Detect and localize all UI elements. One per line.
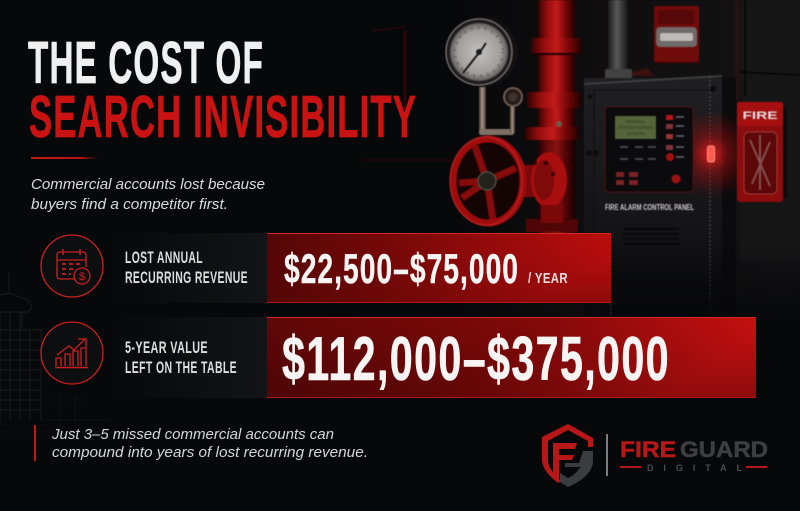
title line 1: THE COST OF: [28, 30, 264, 96]
icon: growth chart: [41, 322, 103, 384]
subtitle: [31, 176, 265, 213]
fire pull station: [737, 102, 787, 202]
wall: [440, 0, 800, 320]
label text: RECURRING REVENUE: [125, 268, 248, 287]
keypad: [620, 147, 656, 159]
panel bolts: [586, 86, 716, 156]
title rule: [31, 157, 98, 159]
icon: calendar with dollar: [41, 235, 103, 297]
wordmark FIRE: FIRE: [620, 437, 676, 462]
label text: LOST ANNUAL: [125, 248, 203, 267]
label text: [125, 338, 237, 377]
label text: 5-YEAR VALUE: [125, 338, 208, 357]
icon: shield monogram: [542, 424, 593, 487]
label text: [125, 248, 248, 287]
row 1: lost annual recurring revenue: [41, 233, 611, 303]
callout: [34, 425, 368, 461]
grey conduit: [605, 0, 655, 81]
callout bar: [34, 425, 36, 461]
red vertical pipe: [525, 0, 582, 233]
logo divider: [606, 434, 608, 476]
control face: [605, 107, 693, 192]
equipment photo illustration: [362, 0, 800, 322]
valve body: [515, 152, 567, 223]
darkening below the panel: [611, 240, 800, 322]
logo: FireGuard Digital: [542, 424, 768, 487]
lcd display: NORMAL: [626, 119, 646, 124]
valve handwheel: [450, 137, 523, 225]
label text: LEFT ON THE TABLE: [125, 358, 237, 377]
lcd display: SYSTEM NORMAL: [617, 125, 654, 130]
wordmark GUARD: GUARD: [680, 437, 768, 462]
callout text: [51, 426, 368, 461]
pressure gauge: [446, 17, 518, 87]
callout text: compound into years of lost recurring revenue.: [52, 444, 368, 461]
value box: [267, 317, 756, 398]
lcd display: [615, 116, 656, 139]
alarm strobe: [654, 6, 699, 64]
title line 2: SEARCH INVISIBILITY: [29, 84, 417, 150]
red glow: [667, 110, 755, 198]
title: [28, 30, 417, 150]
fire alarm control panel: [584, 76, 755, 318]
lcd display: 10:15 AM: [627, 131, 645, 136]
row 2: five-year value: [41, 317, 756, 398]
value box: [267, 233, 611, 303]
callout text: Just 3–5 missed commercial accounts can: [51, 426, 334, 443]
digital tagline: DIGITAL: [647, 463, 742, 473]
subtitle: buyers find a competitor first.: [31, 196, 228, 213]
led: [708, 146, 714, 162]
icon: calendar with dollar: $: [79, 271, 85, 283]
value: $22,500–$75,000: [284, 245, 519, 292]
faint building sketch: [0, 272, 120, 440]
label panel: [105, 233, 267, 303]
unit: / YEAR: [528, 270, 568, 287]
vent slots: [623, 229, 679, 244]
label panel: [105, 317, 267, 398]
fire pull station: FIRE: [742, 110, 778, 122]
panel label: FIRE ALARM CONTROL PANEL: [605, 203, 694, 212]
subtitle: Commercial accounts lost because: [31, 176, 265, 193]
brass pipework: [479, 87, 522, 135]
